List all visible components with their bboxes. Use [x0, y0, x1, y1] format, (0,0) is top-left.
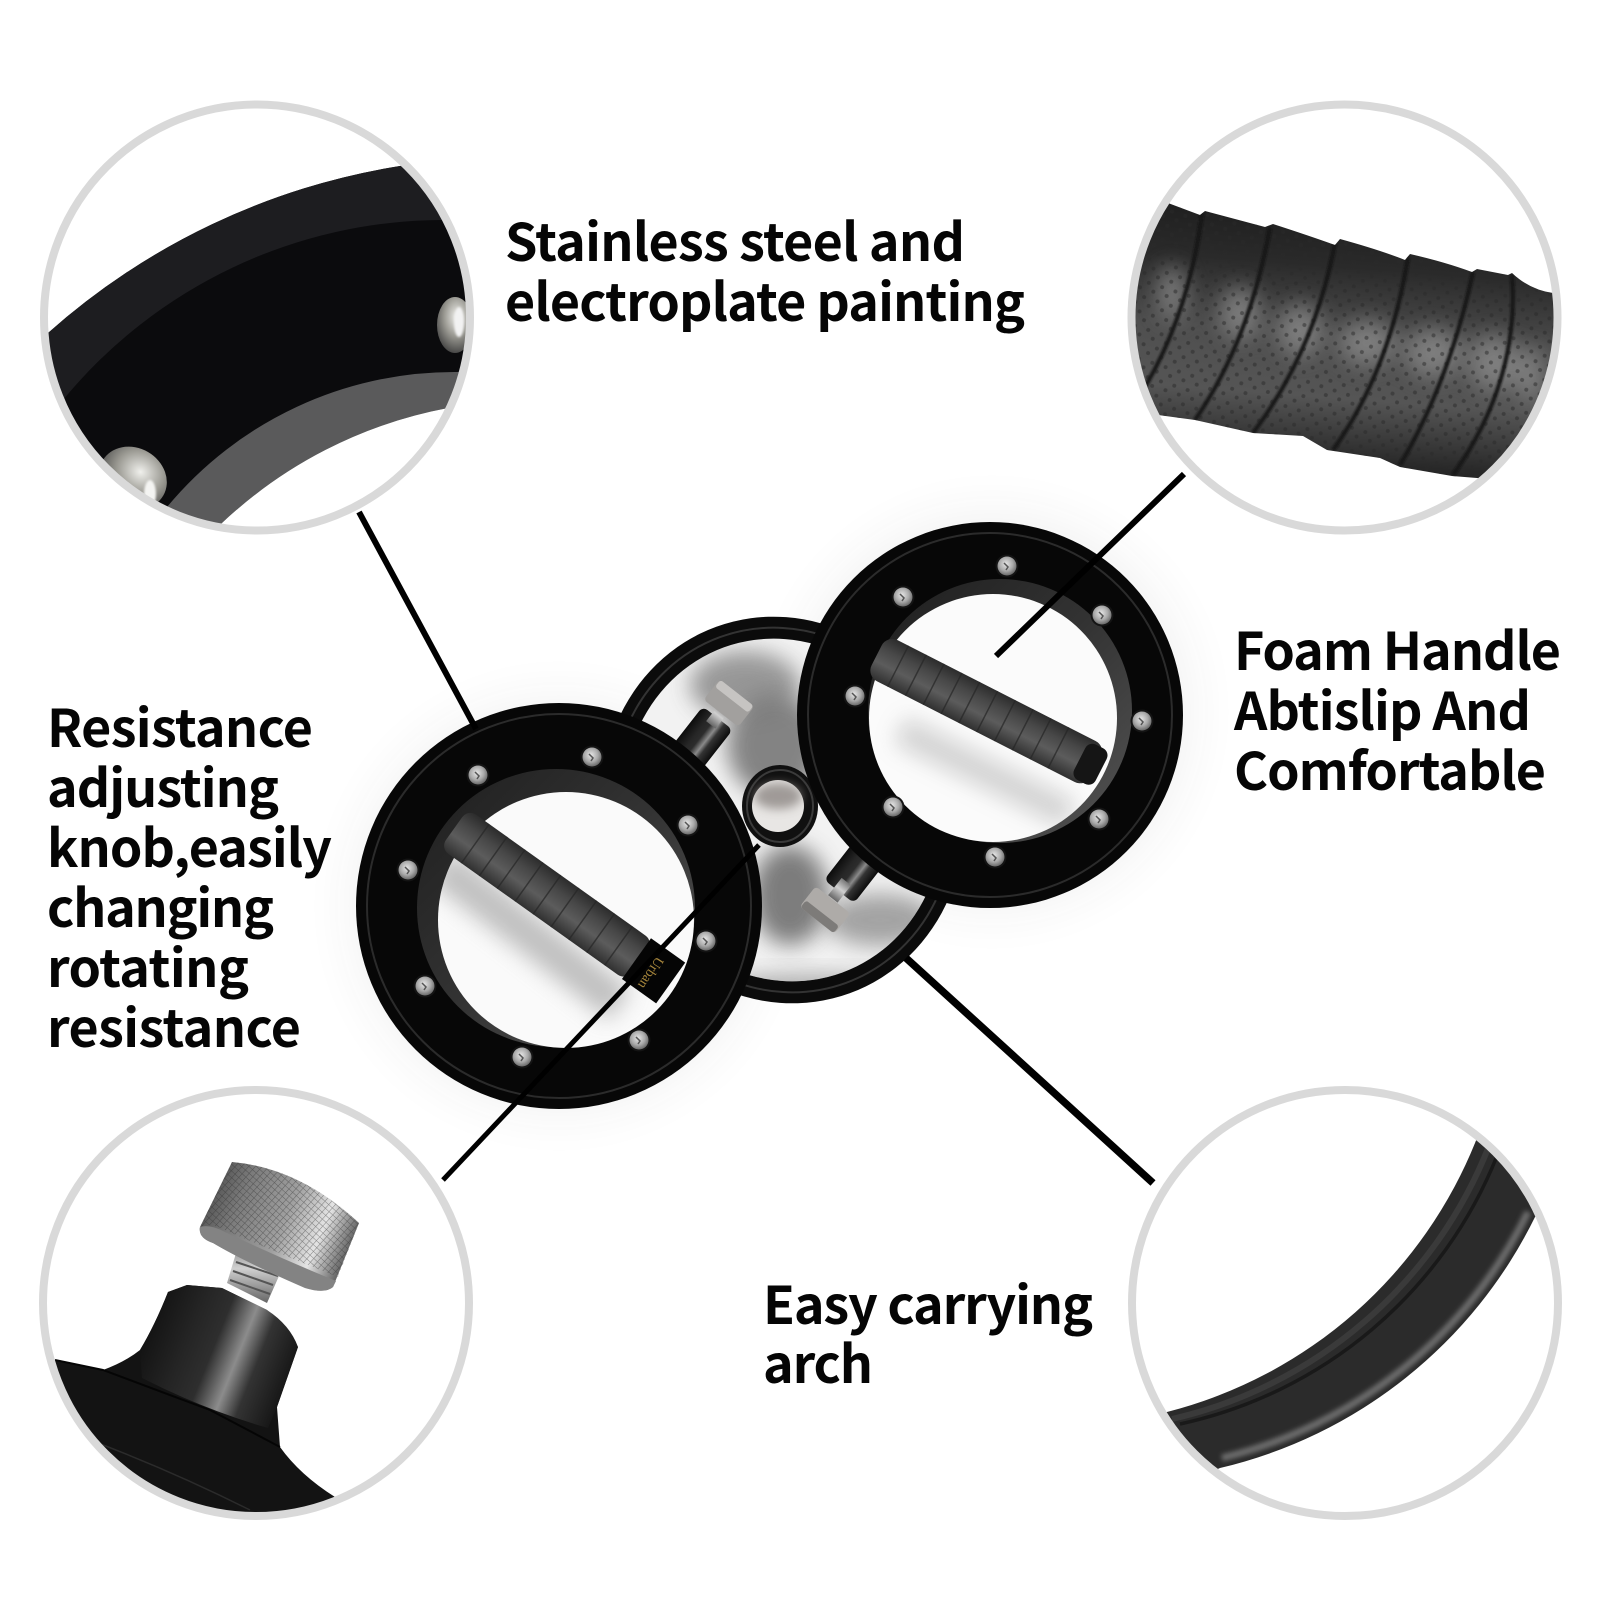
circle border — [43, 1090, 469, 1516]
text: stainless steel — [505, 201, 1025, 336]
text: resistance knob: resistance — [47, 987, 301, 1062]
text: stainless steel: Stainless steel and — [505, 201, 965, 276]
text: resistance knob: adjusting — [47, 747, 279, 822]
text: resistance knob — [47, 687, 332, 1062]
text: foam handle: Comfortable — [1234, 730, 1546, 805]
product: central wrist trainer — [347, 508, 1196, 1118]
right ring screws — [844, 554, 1154, 868]
leader line: stainless steel — [359, 512, 476, 729]
bottom adjusting knob — [800, 839, 886, 934]
left ring screws — [396, 746, 718, 1068]
black base — [54, 1285, 335, 1512]
left handle ring — [356, 703, 762, 1109]
soft floor shadow — [347, 508, 1196, 1118]
text: foam handle: Abtislip And — [1233, 670, 1531, 745]
leader line: adjusting knob — [443, 845, 759, 1180]
carrying arch ring — [621, 616, 947, 1004]
top adjusting knob — [671, 679, 754, 771]
right foam handle — [866, 635, 1112, 790]
text: resistance knob: knob,easily — [47, 807, 332, 882]
knurled cap — [200, 1162, 359, 1291]
brand label: Urban — [634, 954, 666, 991]
detail circle: carrying arch — [1130, 1090, 1560, 1516]
circle border — [1132, 1090, 1558, 1516]
detail circle: foam handle — [1100, 104, 1590, 530]
detail circle: stainless steel ring — [40, 100, 474, 534]
left handle shadow — [440, 865, 620, 1005]
text: foam handle: Foam Handle — [1234, 610, 1561, 685]
text: foam handle — [1233, 610, 1561, 805]
right handle shadow — [900, 730, 1070, 815]
small connecting ring — [742, 765, 818, 847]
leader line: foam handle — [996, 474, 1184, 656]
text: resistance knob: Resistance — [47, 687, 313, 762]
right handle ring — [797, 522, 1183, 908]
base cylinder — [140, 1285, 298, 1428]
text: carrying arch: Easy carrying — [763, 1264, 1093, 1339]
leader line: carrying arch — [906, 958, 1153, 1183]
detail circle: adjusting knob — [30, 1090, 469, 1540]
left foam handle — [440, 808, 685, 1003]
text: carrying arch: arch — [763, 1323, 873, 1398]
circle border — [44, 104, 470, 530]
text: carrying arch — [763, 1264, 1093, 1398]
text: resistance knob: changing — [47, 867, 274, 942]
text: stainless steel: electroplate painting — [505, 261, 1025, 336]
thread — [227, 1256, 279, 1303]
text: resistance knob: rotating — [47, 927, 249, 1002]
circle border — [1132, 104, 1558, 530]
